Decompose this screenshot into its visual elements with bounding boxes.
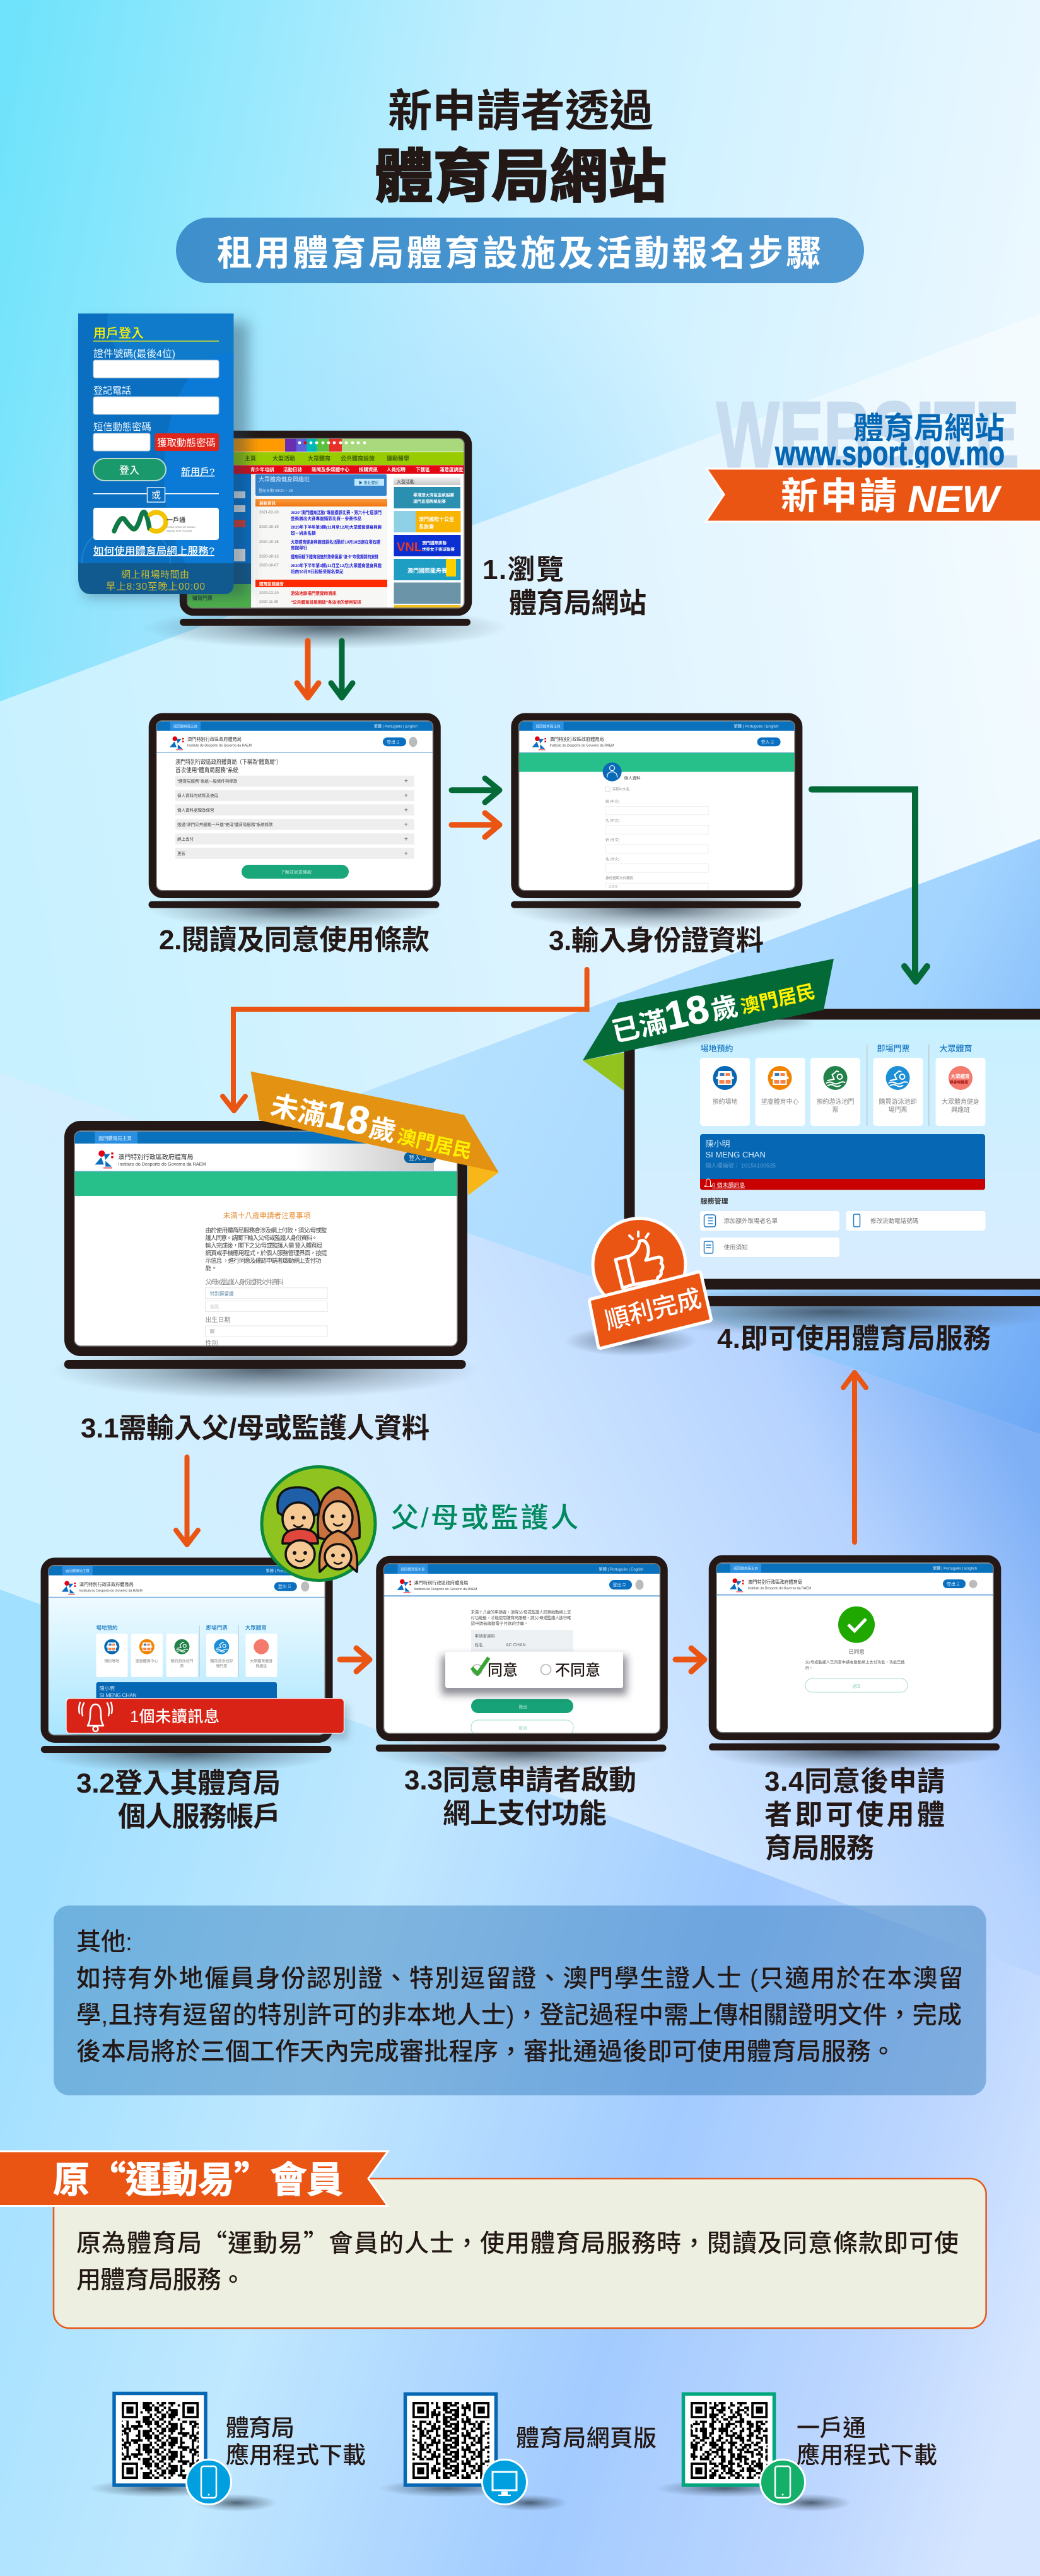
heading tag: 原“運動易”會員 [53, 2150, 343, 2203]
laptop 8: consent completed: 澳門特別行政區政府體育局 [748, 1579, 802, 1585]
laptop 8: consent completed: Instituto do Desporto do Governo da RAEM [748, 1587, 811, 1591]
laptop 7: guardian consent: 繁體 | Português | English [599, 1567, 643, 1572]
laptop 6: guardian login: 場地預約 [96, 1625, 118, 1631]
unread message bar [66, 1699, 348, 1740]
laptop 1: sport bureau website: 2020年下半年第3期(11月至12月)大眾體育健身興趣 [291, 563, 382, 568]
laptop 3: id info [508, 717, 805, 930]
laptop 2: terms: 透過“澳門公共服務一戶通”使用“體育局服務”系統條款 [177, 822, 273, 828]
badge: smooth completion [564, 1217, 709, 1356]
laptop 1: sport bureau website: 2020-10-15 [259, 541, 279, 544]
laptop 4: services dashboard: 預約場地 [713, 1098, 738, 1106]
laptop 1: sport bureau website: 2020-11-30 [259, 600, 279, 604]
login panel: 證件號碼(最後4位) [93, 348, 175, 360]
laptop 6: guardian login: 場門票 [216, 1664, 227, 1669]
laptop 6: guardian login: 澳門特別行政區政府體育局 [79, 1582, 134, 1588]
laptop 1: sport bureau website: 人員招聘 [387, 466, 406, 472]
laptop 2: terms: 登出 ⍈ [387, 739, 399, 745]
laptop 5: under-18 parent info: 由於使用體育局服務會涉及網上付款，須父/母或監 [206, 1227, 327, 1234]
laptop 6: guardian login: 繁體 | Português | English [266, 1569, 310, 1574]
service icons: 大眾體育 [951, 1073, 970, 1079]
service icons: 健身興趣班 [950, 1080, 969, 1085]
login panel: 登記電話 [93, 385, 131, 396]
service management: 使用須知 [724, 1244, 748, 1251]
laptop 1: sport bureau website: 主頁 [245, 455, 256, 462]
laptop 1: sport bureau website: 體育設施通告 [259, 581, 284, 587]
laptop 5: under-18 parent info: 能。 [206, 1265, 218, 1272]
laptop 3: id info: Instituto do Desporto do Governo da RAEM [550, 744, 614, 748]
laptop 1: sport bureau website: 粵港澳大灣區盃帆船賽 [413, 492, 454, 498]
laptop 1: sport bureau website: 2020年下半年第3期(11月至12月)大眾體育健身興趣 [291, 524, 382, 530]
section labels: 場地預約 [700, 1044, 733, 1053]
laptop 1: sport bureau website: 澳門國際龍舟賽 [407, 567, 447, 574]
user card [700, 1134, 985, 1190]
title: 新申請者透過 [388, 86, 653, 136]
laptop 6: guardian login: 返回體育局主頁 [66, 1569, 90, 1574]
section labels: 大眾體育 [940, 1044, 973, 1053]
laptop 5: under-18 parent info: 澳門特別行政區政府體育局 [119, 1153, 193, 1161]
panel: former sport easy members [0, 2150, 986, 2328]
laptop 1: sport bureau website: 2020-10-19 [259, 525, 279, 529]
laptop 7: guardian consent: 取消 [518, 1725, 527, 1731]
step 3.4 caption: 育局服務 [764, 1833, 874, 1864]
laptop 2: terms: 首次使用“體育局服務”系統 [175, 766, 238, 775]
laptop 1: sport bureau website: 班由10月9日起接受報名登記 [291, 569, 344, 574]
panel: others note: 如持有外地僱員身份認別證、特別逗留證、澳門學生證人士 (只適用於在本澳留 [76, 1965, 963, 1993]
step 3.2 caption: 3.2登入其體育局 [76, 1768, 281, 1799]
arrow: orange step 2 to 3 [452, 813, 500, 837]
user card: SI MENG CHAN [705, 1150, 766, 1159]
laptop 1: sport bureau website: 育館舉行 [291, 545, 308, 551]
laptop 5: under-18 parent info: 返回體育局主頁 [98, 1135, 132, 1142]
laptop 6: guardian login: 票 [180, 1665, 184, 1669]
icon: phone green [761, 2460, 805, 2504]
laptop 4: services dashboard: 票 [833, 1106, 839, 1114]
laptop 3: id info: 姓 (外文) [605, 838, 619, 843]
laptop 5: under-18 parent info: 未滿十八歲申請者注意事項 [223, 1211, 311, 1220]
laptop 4: services dashboard: 興趣班 [951, 1106, 970, 1114]
laptop 2: terms: 繁體 | Português | English [374, 724, 418, 729]
laptop 2: terms: “體育局服務”系統一般條件與條款 [177, 778, 238, 784]
step 3.3 caption [404, 1765, 636, 1829]
laptop 1: sport bureau website: 2020-10-07 [259, 564, 279, 568]
laptop 8: consent completed: 返回體育局主頁 [733, 1566, 758, 1571]
laptop 5: under-18 parent info: 護人同意。請閣下輸入父/母或監護人身份資料。 [206, 1234, 318, 1242]
laptop 1: sport bureau website: VNL [397, 541, 422, 554]
ribbon: under 18: 未滿18歲澳門居民 [267, 1080, 477, 1167]
laptop 3: id info: 返回體育局主頁 [536, 724, 561, 729]
QR: sport bureau app [88, 2393, 366, 2512]
ribbon: 18 or over: 已滿18歲澳門居民 [607, 963, 818, 1051]
laptop 1: sport bureau website: 大眾體育健身興趣班餘名活動於10月18日起在塔石體 [291, 539, 380, 545]
laptop 1: sport bureau website: 購買門票 [192, 595, 213, 601]
icon: phone [187, 2460, 231, 2504]
laptop 6: guardian login: 興趣班 [255, 1664, 267, 1669]
laptop 1: sport bureau website: 滿意度調查 [440, 466, 464, 472]
laptop 6: guardian login: Instituto do Desporto do Governo da RAEM [79, 1590, 143, 1593]
laptop 6: guardian login: 陳小明 [100, 1686, 115, 1692]
laptop 5: under-18 parent info: 網頁或手機應用程式，於個人服務管理界面，按提 [206, 1250, 327, 1257]
login panel: 早上8:30至晚上00:00 [106, 581, 205, 592]
step 3.4 caption: 3.4同意後申請 [764, 1766, 945, 1797]
laptop 2: terms: + [404, 822, 408, 829]
laptop 2: terms: 澳門特別行政區政府體育局 [187, 737, 242, 742]
laptop 8: consent completed: 父/母或監護人已同意申請者啟動網上支付功能，功能已啟 [805, 1660, 905, 1665]
connector: orange to step 3.1 [223, 969, 587, 1111]
step 1 caption [482, 554, 646, 619]
laptop 5: under-18 parent info: 出生日期 [206, 1316, 231, 1324]
icon: one account logo [114, 512, 166, 531]
laptop 5: under-18 parent info: 父/母或監護人身份證明文件資料 [206, 1278, 284, 1286]
panel: others note: 後本局將於三個工作天內完成審批程序，審批通過後即可使用體育局服務。 [76, 2039, 896, 2066]
laptop 1: sport bureau website: 大眾體育健身興趣班 [259, 476, 310, 483]
icon: thumbs up [616, 1232, 663, 1288]
laptop 2: terms: 網上支付 [177, 836, 194, 842]
login panel [77, 313, 257, 604]
laptop 1: sport bureau website: 活動日誌 [283, 466, 302, 472]
login panel: 一戶通 [167, 516, 185, 524]
unread message bar: 1個未讀訊息 [130, 1708, 219, 1726]
laptop 1: sport bureau website: 長跑賽 [419, 524, 434, 530]
laptop 3: id info: 請選擇 [609, 885, 618, 889]
step 3.2 caption [76, 1768, 281, 1832]
laptop 1: sport bureau website [143, 435, 508, 649]
laptop 3: id info: 身份證明文件類別 [605, 875, 633, 881]
website new application badge: 新申請 [781, 476, 897, 517]
service management [700, 1211, 985, 1257]
service icons [713, 1066, 973, 1090]
laptop 1: sport bureau website: 世界女子排球聯賽 [422, 546, 455, 552]
step 3.1 caption: 3.1需輸入父/母或監護人資料 [81, 1413, 429, 1444]
laptop 1: sport bureau website: 登記日期 09/20 ~ 26 [259, 488, 293, 493]
laptop 1: sport bureau website: 採購資訊 [359, 466, 378, 472]
laptop 7: guardian consent: 未滿十八歲的申請者，須待父/母或監護人同意啟動網上支 [470, 1609, 571, 1615]
ribbon: under 18 [251, 1072, 499, 1195]
laptop 7: guardian consent: 登出 ⍈ [613, 1582, 626, 1588]
section labels [700, 1044, 973, 1053]
login panel: Conta Única de Macau [167, 525, 196, 529]
login panel: 網上租場時間由 [121, 570, 189, 580]
laptop 2: terms [146, 717, 443, 930]
step 4 caption: 4.即可使用體育局服務 [717, 1323, 991, 1354]
icon: bell [79, 1702, 112, 1731]
service cards [700, 1058, 985, 1126]
laptop 2: terms: 了解並同意條款 [281, 869, 312, 875]
QR: one account app: 一戶通 [797, 2415, 866, 2441]
laptop 6: guardian login: 大眾體育 [245, 1625, 267, 1631]
laptop 1: sport bureau website: 2020-10-13 [259, 555, 279, 559]
step 3.4 caption [764, 1766, 945, 1864]
laptop 1: sport bureau website: 藝術展出大賽專題攝影比賽－參賽作品 [291, 516, 361, 521]
laptop 6: guardian login: 購買游泳池即 [210, 1659, 233, 1664]
laptop 3: id info: 名 (外文) [605, 857, 619, 862]
title: 體育局網站 [375, 145, 667, 209]
laptop 8: consent completed: 已同意 [848, 1649, 865, 1655]
laptop 1: sport bureau website: 2023-02-20 [259, 592, 279, 595]
login panel: 新用戶? [181, 466, 214, 477]
laptop 7: guardian consent: 認申請者啟動電子付款的步驟。 [470, 1620, 529, 1626]
step 2 caption: 2.閱讀及同意使用條款 [159, 925, 429, 956]
laptop 4: services dashboard: 服務管理 [700, 1197, 728, 1205]
laptop 6: guardian login [38, 1562, 335, 1774]
laptop 8: consent completed: 返回 [853, 1683, 860, 1689]
laptop 5: under-18 parent info: 輸入完成後，閣下之父/母或監護人需 登入體育局 [206, 1242, 323, 1250]
laptop 8: consent completed: 用。 [805, 1666, 813, 1671]
laptop 8: consent completed [706, 1559, 1003, 1771]
laptop 5: under-18 parent info: 示信息 ，進行同意及確認申請者啟動網上支付功 [206, 1257, 322, 1265]
QR: sport bureau app: 體育局 [226, 2415, 295, 2441]
laptop 3: id info: 澳門特別行政區政府體育局 [550, 737, 604, 742]
QR: sport bureau web: 體育局網頁版 [516, 2425, 657, 2451]
laptop 2: terms: + [404, 778, 408, 785]
laptop 7: guardian consent: Instituto do Desporto do Governo da RAEM [414, 1588, 477, 1591]
laptop 1: sport bureau website: "公共體育設施開放"各泳池的使用安排 [291, 599, 361, 605]
laptop 6: guardian login: 即場門票 [206, 1625, 228, 1631]
QR: sport bureau app: 應用程式下載 [226, 2442, 366, 2468]
website new application badge: 體育局網站 [853, 412, 1005, 445]
laptop 5: under-18 parent info: 特別逗留證 [210, 1291, 234, 1297]
section labels: 即場門票 [877, 1044, 910, 1053]
arrow: orange step 3.1 to 3.2 [176, 1457, 198, 1545]
laptop 1: sport bureau website: 公共體育設施 [341, 455, 375, 462]
step 3 caption: 3.輸入身份證資料 [549, 925, 764, 956]
consent popup [441, 1652, 627, 1695]
step 3.3 caption: 3.3同意申請者啟動 [404, 1765, 636, 1796]
icon: monitor [482, 2460, 527, 2504]
laptop 4: services dashboard: 場門票 [888, 1106, 907, 1114]
laptop 7: guardian consent [373, 1560, 670, 1772]
laptop 2: terms: + [404, 851, 408, 858]
laptop 3: id info: 姓 (中文) [605, 799, 619, 804]
title [375, 86, 667, 209]
laptop 3: id info: 個人資料 [624, 775, 641, 781]
user card: 0 個未讀訊息 [712, 1181, 745, 1188]
login panel: 登入 [119, 465, 139, 476]
QR: one account app: 應用程式下載 [797, 2442, 937, 2468]
laptop 7: guardian consent: 送出 [518, 1704, 527, 1709]
user card: 陳小明 [705, 1139, 730, 1149]
laptop 1: sport bureau website: 澳門盃國際帆船賽 [413, 498, 447, 504]
laptop 6: guardian login: 預約游泳池門 [170, 1659, 193, 1664]
panel: former sport easy members: 原為體育局“運動易”會員的人士，使用體育局服務時，閱讀及同意條款即可使 [76, 2224, 959, 2259]
laptop 3: id info: 名 (中文) [605, 818, 619, 823]
laptop 2: terms: 返回體育局主頁 [173, 724, 197, 729]
laptop 7: guardian consent: 姓名 [474, 1642, 483, 1648]
step 1 caption: 體育局網站 [509, 588, 646, 619]
laptop 6: guardian login: 望廈體育中心 [136, 1659, 158, 1664]
subtitle pill: 租用體育局體育設施及活動報名步驟 [217, 233, 821, 273]
login panel: 如何使用體育局網上服務? [93, 545, 214, 557]
laptop 7: guardian consent: 付功能後，才能使用體育局服務。請父/母或監護人進行確 [470, 1615, 571, 1620]
laptop 6: guardian login: 預約場地 [104, 1659, 119, 1664]
panel: others note: 其他: [76, 1929, 132, 1956]
laptop 5: under-18 parent info: Instituto do Desporto do Governo da RAEM [119, 1161, 206, 1167]
consent popup: 不同意 [555, 1662, 600, 1679]
laptop 1: sport bureau website: 大型活動 [397, 479, 414, 484]
laptop 2: terms: 個人資料處理及保管 [177, 807, 214, 813]
panel: others note: 學,且持有逗留的特別許可的非本地人士)，登記過程中需上傳相關證明文件，完成 [76, 2002, 962, 2029]
website new application badge: NEW [908, 478, 1002, 520]
laptop 1: sport bureau website: 青少年培訓 [250, 466, 274, 472]
laptop 4: services dashboard: 望廈體育中心 [761, 1098, 798, 1106]
label: parents or guardian: 父/母或監護人 [391, 1502, 578, 1533]
panel: former sport easy members: 用體育局服務。 [76, 2267, 245, 2294]
laptop 5: under-18 parent info [50, 1126, 479, 1399]
arrow: orange from step 1 to step 2 [297, 641, 318, 698]
login panel: 短信動態密碼 [93, 422, 151, 433]
consent popup: 同意 [488, 1662, 518, 1679]
laptop 6: guardian login: SI MENG CHAN [100, 1693, 137, 1699]
laptop 4: services dashboard: 大眾體育健身 [942, 1098, 979, 1106]
laptop 1: sport bureau website: 大型活動 [272, 455, 295, 462]
laptop 4: services dashboard: 預約游泳池門 [816, 1098, 854, 1106]
laptop 2: terms: + [404, 793, 408, 800]
laptop 1: sport bureau website: ▶ 由此登記 [359, 481, 379, 486]
laptop 5: under-18 parent info: 登入 ⍈ [409, 1155, 426, 1162]
laptop 4: services dashboard: 購買游泳池即 [879, 1098, 917, 1106]
service management: 添加額外取場者名單 [724, 1217, 778, 1225]
laptop 1: sport bureau website: 新聞及多媒體中心 [312, 466, 349, 472]
laptop 2: terms: 澳門特別行政區政府體育局（下稱為“體育局”） [175, 758, 281, 766]
laptop 7: guardian consent: 返回體育局主頁 [401, 1567, 425, 1572]
login panel: 或 [151, 490, 161, 501]
laptop 1: sport bureau website: 大眾體育 [308, 455, 330, 462]
laptop 5: under-18 parent info: 性別 [206, 1339, 218, 1347]
laptop 4: services dashboard [605, 1014, 1040, 1336]
laptop 2: terms: + [404, 807, 408, 814]
laptop 2: terms: 更新 [177, 851, 185, 857]
laptop 1: sport bureau website: 下載區 [416, 466, 430, 472]
laptop 1: sport bureau website: 運動醫學 [387, 455, 409, 462]
QR: sport bureau web [378, 2394, 657, 2511]
laptop 2: terms: + [404, 836, 408, 843]
laptop 5: under-18 parent info: 號碼 [210, 1304, 219, 1309]
laptop 7: guardian consent: AC CHAN [506, 1643, 526, 1648]
arrow: orange up to step 4 [843, 1373, 866, 1542]
laptop 3: id info: 沒有中文名 [612, 787, 629, 792]
subtitle pill [176, 218, 864, 283]
login panel: 用戶登入 [93, 326, 144, 341]
step 3.4 caption: 者即可使用體 [764, 1800, 945, 1830]
laptop 3: id info: 繁體 | Português | English [734, 724, 779, 729]
step 1 caption: 1.瀏覽 [482, 554, 564, 585]
arrow: orange 3.3 to 3.4 [675, 1648, 704, 1671]
laptop 7: guardian consent: 澳門特別行政區政府體育局 [414, 1580, 468, 1586]
user card: 個人檔編號： 10154100535 [705, 1162, 776, 1169]
connector: green to step 4 [812, 790, 927, 981]
laptop 1: sport bureau website: 體育局轄下體育設施於熱帶風暴"浪卡"吹襲期間的安排 [291, 554, 378, 559]
laptop 2: terms: 個人資料的收集及使用 [177, 793, 218, 799]
laptop 6: guardian login: 登出 ⍈ [278, 1584, 291, 1590]
badge: smooth completion: 順利完成 [602, 1285, 704, 1335]
ribbon: 18 or over [583, 959, 834, 1091]
laptop 1: sport bureau website: 澳門國際排聯 [422, 540, 447, 546]
laptop 1: sport bureau website: 游泳池即場門票實時資訊 [291, 590, 337, 596]
laptop 8: consent completed: 繁體 | Português | English [933, 1566, 977, 1571]
laptop 6: guardian login: 大眾體育健身 [250, 1659, 272, 1664]
arrow: green from step 1 to step 2 [331, 641, 353, 698]
laptop 3: id info: 登入 ⍈ [761, 739, 774, 745]
parents family icon [262, 1467, 375, 1581]
step 3.3 caption: 網上支付功能 [443, 1798, 607, 1829]
login panel: Macao One Account [167, 529, 192, 532]
service management: 修改流動電話號碼 [870, 1217, 918, 1225]
laptop 1: sport bureau website: 班－尚余名額 [291, 530, 316, 536]
laptop 1: sport bureau website: 最新資訊 [259, 500, 276, 506]
laptop 7: guardian consent: 申請者資料 [474, 1633, 496, 1639]
login panel: 獲取動態密碼 [157, 437, 216, 448]
laptop 2: terms: Instituto do Desporto do Governo da RAEM [187, 744, 252, 748]
panel: others note [54, 1906, 986, 2095]
arrow: orange 3.2 to 3.3 [340, 1648, 370, 1671]
arrow: green step 2 to 3 [452, 778, 500, 802]
step 3.2 caption: 個人服務帳戶 [118, 1801, 281, 1832]
laptop 1: sport bureau website: 2021-02-10 [259, 511, 279, 515]
laptop 1: sport bureau website: 澳門國際十公里 [419, 516, 454, 522]
laptop 1: sport bureau website: 2020"澳門體育活動"專題攝影比賽．第六十七屆澳門 [291, 510, 382, 515]
laptop 8: consent completed: 登出 ⍈ [947, 1581, 959, 1587]
QR: one account app [656, 2394, 937, 2512]
